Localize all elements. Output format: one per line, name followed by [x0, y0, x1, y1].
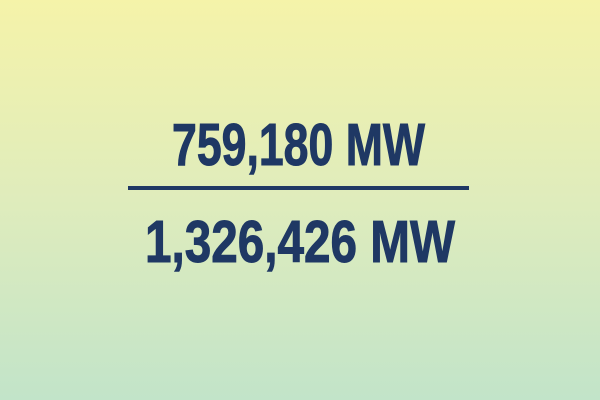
fraction bar: [128, 186, 469, 190]
numerator text: 759,180 MW: [172, 112, 425, 178]
denominator text: 1,326,426 MW: [145, 209, 455, 275]
